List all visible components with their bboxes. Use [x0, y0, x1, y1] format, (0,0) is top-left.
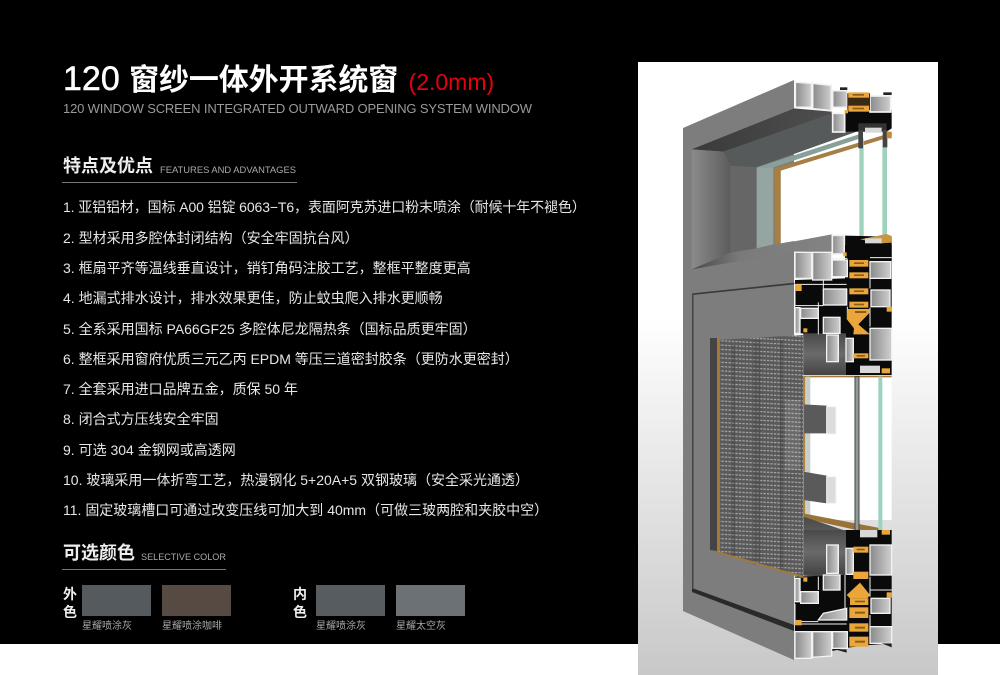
mesh screen [717, 335, 803, 578]
upper fixed light opening [692, 82, 892, 295]
colour swatches: interior: 星耀喷涂灰 [316, 621, 366, 632]
transom line on face [692, 283, 794, 295]
front face of frame [683, 80, 794, 660]
lower section profile cutaway [795, 530, 892, 658]
colour swatches: exterior: 星耀喷涂咖啡 [162, 621, 222, 632]
feature list: 3. 框扇平齐等温线垂直设计，销钉角码注胶工艺，整框平整度更高 [63, 260, 471, 276]
feature list: 1. 亚铝铝材，国标 A00 铝锭 6063−T6，表面阿克苏进口粉末喷涂（耐候十年不褪色） [63, 199, 586, 215]
lower opening with glass [803, 375, 892, 578]
feature list: 6. 整框采用窗府优质三元乙丙 EPDM 等压三道密封胶条（更防水更密封） [63, 351, 519, 367]
section: transom top [845, 236, 892, 260]
panel: product image background [638, 62, 938, 675]
screen brace upper [803, 404, 836, 434]
heading: features: 特点及优点 FEATURES AND ADVANTAGES [63, 156, 296, 176]
section: top frame [795, 82, 891, 132]
mid section profile cutaway [795, 245, 892, 375]
colour swatches: exterior [63, 585, 231, 632]
feature list: 9. 可选 304 金钢网或高透网 [63, 442, 236, 458]
feature list: 10. 玻璃采用一体折弯工艺，热漫钢化 5+20A+5 双钢玻璃（安全采光通透） [63, 472, 529, 488]
colour swatches: interior: 内 [293, 586, 307, 602]
feature list: 5. 全系采用国标 PA66GF25 多腔体尼龙隔热条（国标品质更牢固） [63, 321, 477, 337]
screen brace lower [803, 472, 836, 503]
heading: selective color: 可选颜色 SELECTIVE COLOR [63, 543, 226, 563]
feature list: 4. 地漏式排水设计，排水效果更佳，防止蚊虫爬入排水更顺畅 [63, 290, 443, 306]
title: 120 窗纱一体外开系统窗 (2.0mm) [63, 60, 494, 98]
subtitle: 120 WINDOW SCREEN INTEGRATED OUTWARD OPENING SYSTEM WINDOW [63, 101, 532, 116]
colour swatches: exterior: 星耀喷涂灰 [82, 621, 132, 632]
colour swatches: interior [293, 585, 465, 632]
sash face and reveal [692, 294, 794, 631]
feature list: 2. 型材采用多腔体封闭结构（安全牢固抗台风） [63, 230, 359, 246]
colour swatches: interior: 色 [293, 604, 307, 620]
feature list [63, 199, 586, 518]
colour swatches: interior: 星耀太空灰 [396, 621, 446, 632]
window cutaway illustration [683, 80, 892, 660]
glass panes upper [859, 138, 887, 240]
feature list: 8. 闭合式方压线安全牢固 [63, 411, 219, 427]
colour swatches: exterior: 色 [63, 604, 77, 620]
feature list: 7. 全套采用进口品牌五金，质保 50 年 [63, 381, 298, 397]
colour swatches: exterior: 外 [63, 586, 77, 602]
feature list: 11. 固定玻璃槽口可通过改变压线可加大到 40mm（可做三玻两腔和夹胶中空） [63, 502, 548, 518]
glass panes lower [855, 377, 882, 533]
